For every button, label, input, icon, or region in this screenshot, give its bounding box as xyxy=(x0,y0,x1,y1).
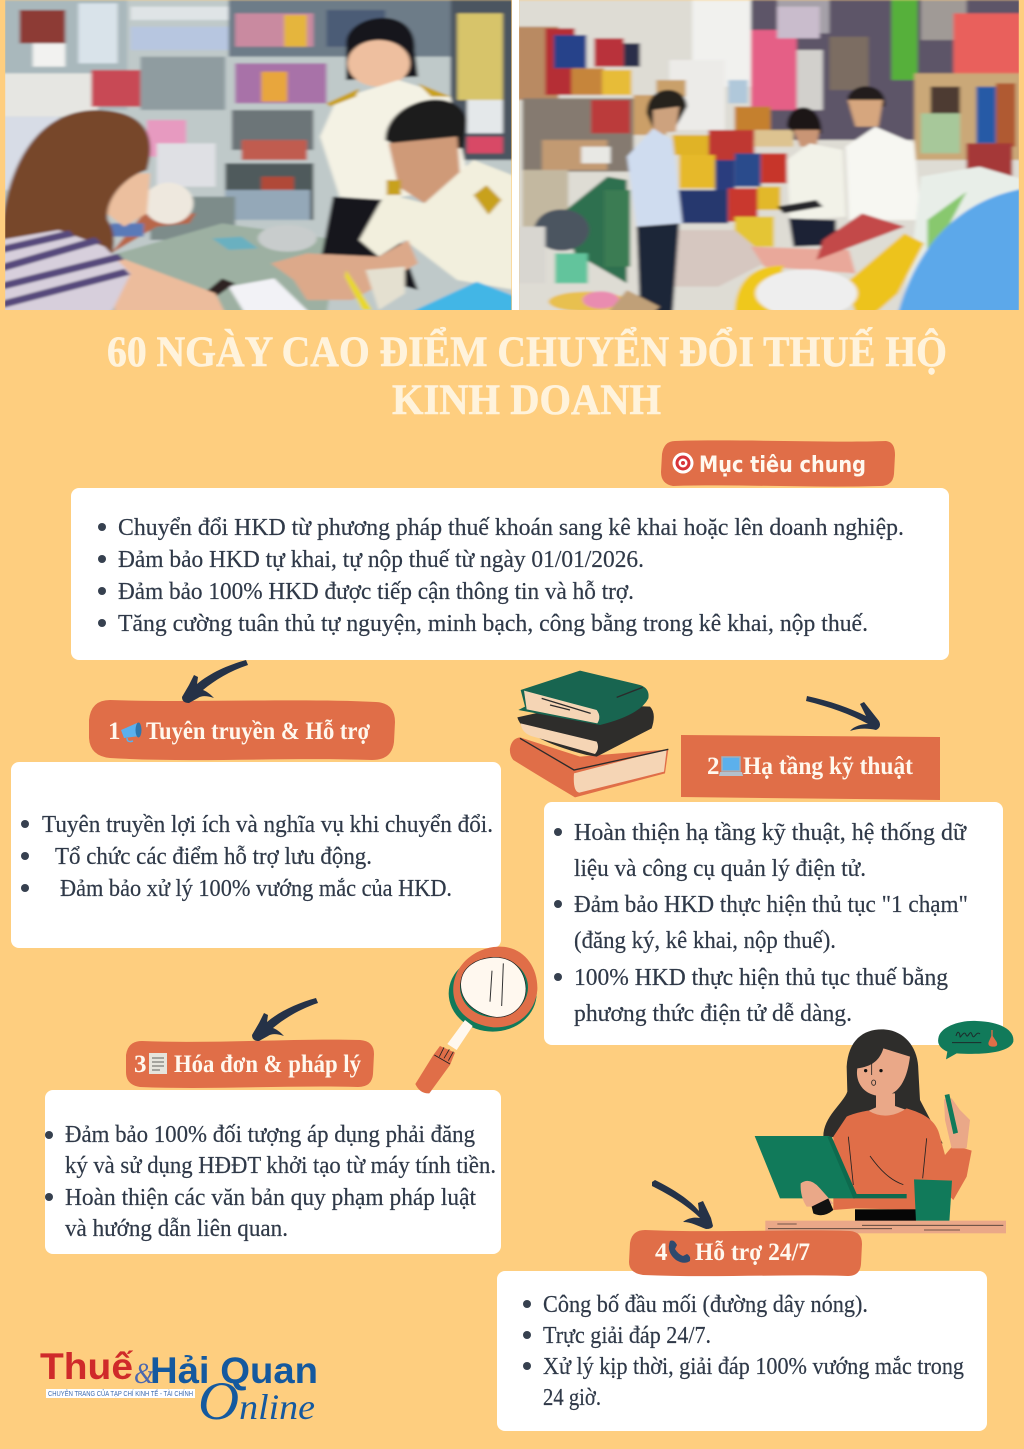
heading: general goals xyxy=(661,440,895,487)
panel: general goals xyxy=(71,488,949,660)
panel: section 3: Hoàn thiện các văn bản quy phạm pháp luật xyxy=(65,1185,476,1211)
heading: section 2 xyxy=(681,735,940,800)
icon: magnifying glass xyxy=(415,947,537,1093)
heading: section 2: Hạ tầng kỹ thuật xyxy=(743,753,914,780)
heading: section 3: 3 xyxy=(134,1051,146,1078)
panel: section 3: ký và sử dụng HĐĐT khởi tạo từ máy tính tiền. xyxy=(65,1153,496,1179)
panel: section 1: Tổ chức các điểm hỗ trợ lưu động. xyxy=(55,844,372,870)
title: 60 NGÀY CAO ĐIỂM CHUYỂN ĐỔI THUẾ HỘ xyxy=(107,327,947,376)
panel: section 2: Hoàn thiện hạ tầng kỹ thuật, hệ thống dữ xyxy=(574,820,967,846)
panel: section 4: Xử lý kịp thời, giải đáp 100% vướng mắc trong xyxy=(543,1354,964,1380)
arrow to section 2 xyxy=(806,696,880,731)
panel: section 4: Trực giải đáp 24/7. xyxy=(543,1323,711,1349)
panel: section 4 xyxy=(497,1271,987,1431)
heading: section 3: Hóa đơn & pháp lý xyxy=(174,1051,361,1078)
photo: tax officers helping a stationery shop owner xyxy=(0,0,516,313)
panel: section 1 xyxy=(11,762,501,948)
logo: Thuế & Hải Quan Online: & xyxy=(134,1357,155,1390)
heading: section 1: Tuyên truyền & Hỗ trợ xyxy=(146,718,370,745)
photo: officers inspecting a general goods shop xyxy=(516,0,1024,317)
panel: section 2 xyxy=(544,802,1003,1045)
panel: section 2: Đảm bảo HKD thực hiện thủ tục "1 chạm" xyxy=(574,892,968,918)
heading: section 3 xyxy=(126,1040,374,1088)
panel: general goals: Đảm bảo HKD tự khai, tự nộp thuế từ ngày 01/01/2026. xyxy=(118,547,644,573)
panel: section 3: Đảm bảo 100% đối tượng áp dụng phải đăng xyxy=(65,1122,475,1148)
panel: section 1: Tuyên truyền lợi ích và nghĩa vụ khi chuyển đổi. xyxy=(42,812,493,838)
panel: section 2: liệu và công cụ quản lý điện tử. xyxy=(574,856,866,882)
panel: section 4: 24 giờ. xyxy=(543,1385,601,1411)
logo: Thuế & Hải Quan Online xyxy=(40,1346,318,1431)
icon: telephone xyxy=(669,1240,690,1263)
arrow to section 3 xyxy=(252,998,318,1041)
panel: section 4: Công bố đầu mối (đường dây nóng). xyxy=(543,1292,868,1318)
title: KINH DOANH xyxy=(392,377,661,424)
white gap between photos xyxy=(512,0,519,310)
panel: section 3: và hướng dẫn liên quan. xyxy=(65,1216,288,1242)
panel: general goals: Đảm bảo 100% HKD được tiếp cận thông tin và hỗ trợ. xyxy=(118,579,634,605)
logo: Thuế & Hải Quan Online: Hải Quan xyxy=(150,1350,318,1391)
arrow to section 1 xyxy=(182,660,248,703)
panel: section 2: phương thức điện tử dễ dàng. xyxy=(574,1001,852,1027)
logo: Thuế & Hải Quan Online: Thuế xyxy=(40,1346,133,1387)
heading: section 2: 2 xyxy=(707,753,720,780)
heading: section 4 xyxy=(629,1230,862,1276)
logo: Thuế & Hải Quan Online: CHUYÊN TRANG CỦA TẠP CHÍ KINH TẾ - TÀI CHÍNH xyxy=(48,1388,193,1398)
heading: section 1: 1 xyxy=(108,718,120,745)
panel: general goals: Tăng cường tuân thủ tự nguyện, minh bạch, công bằng trong kê khai, nộp thuế. xyxy=(118,611,868,637)
icon: stack of books xyxy=(510,671,668,797)
panel: section 3 xyxy=(45,1090,501,1254)
panel: section 2: 100% HKD thực hiện thủ tục thuế bằng xyxy=(574,965,948,991)
icon: woman with tablet and speech bubble xyxy=(755,1021,1013,1233)
panel: section 2: (đăng ký, kê khai, nộp thuế). xyxy=(574,928,836,954)
panel: section 1: Đảm bảo xử lý 100% vướng mắc của HKD. xyxy=(60,876,452,902)
panel: general goals: Chuyển đổi HKD từ phương pháp thuế khoán sang kê khai hoặc lên doanh nghiệp. xyxy=(118,515,904,541)
heading: section 1 xyxy=(89,700,395,760)
arrow to section 4 xyxy=(652,1180,713,1229)
title xyxy=(107,327,947,424)
logo: Thuế & Hải Quan Online: Online xyxy=(198,1371,315,1431)
heading: general goals: Mục tiêu chung xyxy=(699,453,866,478)
heading: section 4: Hỗ trợ 24/7 xyxy=(695,1239,810,1266)
heading: section 4: 4 xyxy=(655,1239,668,1266)
